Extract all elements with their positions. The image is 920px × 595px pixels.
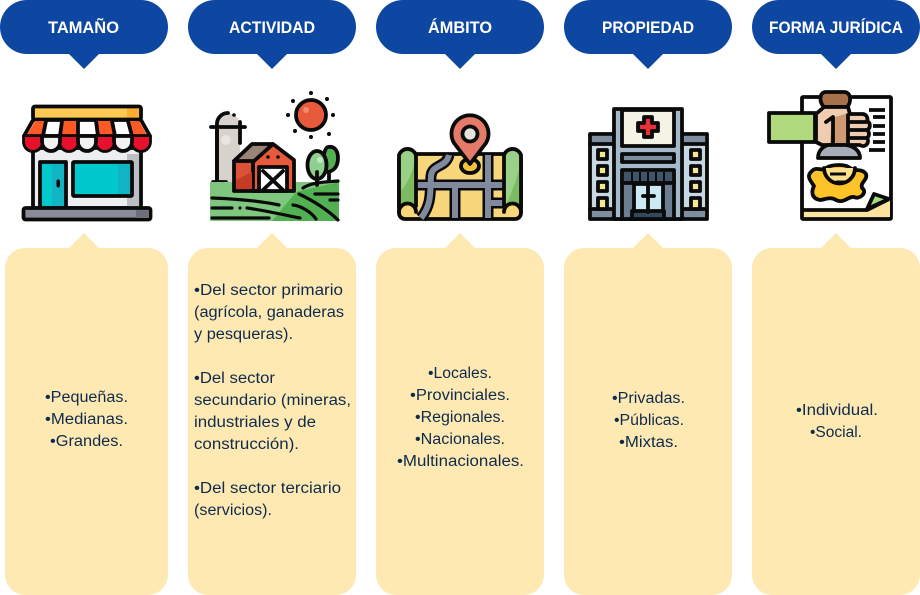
panel: ámbito: [376, 233, 544, 595]
panel: actividad: industriales y de: [194, 414, 316, 431]
header: FORMA JURÍDICA: FORMA JURÍDICA: [769, 18, 903, 37]
panel: actividad: (agrícola, ganaderas: [194, 304, 344, 321]
panel: actividad: •Del sector terciario: [194, 480, 341, 497]
panel: tamaño: •Medianas.: [45, 411, 128, 428]
panel: forma jurídica: •Individual.: [796, 402, 878, 419]
panel: tamaño: [5, 233, 168, 595]
panel: actividad: construcción).: [194, 436, 299, 453]
header: TAMAÑO: [0, 0, 168, 69]
header: ÁMBITO: [376, 0, 544, 69]
panel: propiedad: •Privadas.: [612, 390, 685, 407]
icon: hospital: [590, 109, 707, 219]
panel: propiedad: •Mixtas.: [619, 434, 678, 451]
header: PROPIEDAD: [564, 0, 732, 69]
header: PROPIEDAD: PROPIEDAD: [602, 19, 694, 37]
panel: actividad: y pesqueras).: [194, 326, 293, 343]
icon: farm: [210, 91, 339, 221]
panel: actividad: (servicios).: [194, 502, 272, 519]
panel: actividad: secundario (mineras,: [194, 392, 351, 409]
header: ACTIVIDAD: [188, 0, 356, 69]
icon: legal document and stamp: [769, 92, 891, 219]
panel: actividad: [188, 233, 356, 595]
icon: map: [399, 115, 521, 219]
panel: propiedad: [564, 233, 732, 595]
panel: tamaño: •Grandes.: [50, 433, 123, 450]
panel: ámbito: •Multinacionales.: [397, 453, 524, 470]
header: FORMA JURÍDICA: [752, 0, 920, 69]
panel: ámbito: •Locales.: [428, 365, 492, 382]
panel: actividad: •Del sector: [194, 370, 275, 387]
panel: ámbito: •Nacionales.: [415, 431, 505, 448]
panel: forma jurídica: •Social.: [810, 424, 862, 441]
panel: propiedad: •Públicas.: [614, 412, 684, 429]
header: ÁMBITO: ÁMBITO: [428, 18, 492, 37]
panel: tamaño: •Pequeñas.: [45, 389, 128, 406]
panel: ámbito: •Regionales.: [415, 409, 505, 426]
panel: ámbito: •Provinciales.: [410, 387, 510, 404]
icon: store: [24, 106, 150, 220]
header: TAMAÑO: TAMAÑO: [48, 17, 119, 37]
panel: forma jurídica: [752, 233, 920, 595]
header: ACTIVIDAD: ACTIVIDAD: [229, 19, 315, 37]
panel: actividad: •Del sector primario: [194, 282, 343, 299]
